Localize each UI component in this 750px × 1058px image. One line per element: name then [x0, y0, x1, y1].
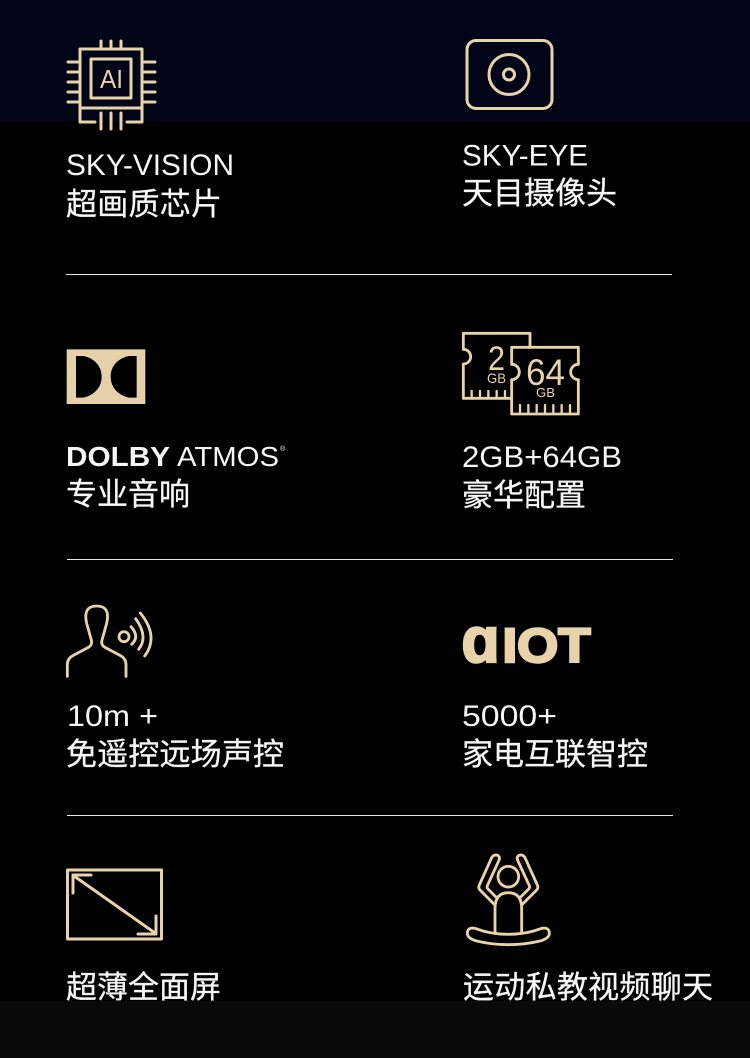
icon: camera	[467, 40, 552, 108]
icon: memory chips: 64	[526, 352, 565, 393]
label: 家电互联智控: 家电互联智控	[462, 729, 648, 774]
label: 运动私教视频聊天: 运动私教视频聊天	[463, 962, 713, 1007]
heading: 5000+: 5000+	[462, 700, 557, 733]
icon: aIOT logo	[462, 604, 590, 676]
icon: AI chip: AI	[100, 64, 123, 94]
icon: memory chips: GB	[536, 385, 555, 400]
bottom dark band	[0, 1001, 750, 1058]
label: 免遥控远场声控: 免遥控远场声控	[66, 729, 284, 774]
heading: DOLBY ATMOS: ®	[280, 445, 286, 453]
icon: AI chip	[68, 41, 155, 129]
icon: memory chips	[463, 333, 578, 414]
top navy band	[0, 0, 750, 121]
heading: DOLBY ATMOS: DOLBY	[66, 441, 170, 472]
icon: aIOT logo: IOT	[502, 620, 590, 673]
heading: DOLBY ATMOS	[66, 441, 286, 472]
label: 超薄全面屏: 超薄全面屏	[66, 962, 221, 1007]
icon: memory chips: GB	[487, 370, 506, 386]
icon: aIOT logo: ɑ	[462, 604, 500, 676]
icon: voice control	[67, 606, 151, 676]
label: 豪华配置: 豪华配置	[462, 470, 586, 515]
icon: Dolby mark	[67, 349, 145, 404]
icon: memory chips: 2	[488, 340, 505, 378]
heading: DOLBY ATMOS: ATMOS	[177, 441, 279, 472]
icon: full screen	[68, 870, 162, 939]
divider 3	[67, 815, 673, 816]
label: 超画质芯片: 超画质芯片	[66, 179, 222, 224]
divider 2	[67, 559, 673, 560]
heading: 10m +: 10m +	[67, 700, 158, 733]
heading: 2GB+64GB: 2GB+64GB	[462, 441, 622, 474]
heading: SKY-VISION: SKY-VISION	[66, 149, 234, 182]
divider 1	[66, 274, 672, 275]
heading: SKY-EYE: SKY-EYE	[462, 140, 588, 172]
icon: yoga figure	[467, 855, 549, 945]
label: 专业音响: 专业音响	[66, 469, 190, 514]
label: 天目摄像头: 天目摄像头	[462, 168, 617, 213]
